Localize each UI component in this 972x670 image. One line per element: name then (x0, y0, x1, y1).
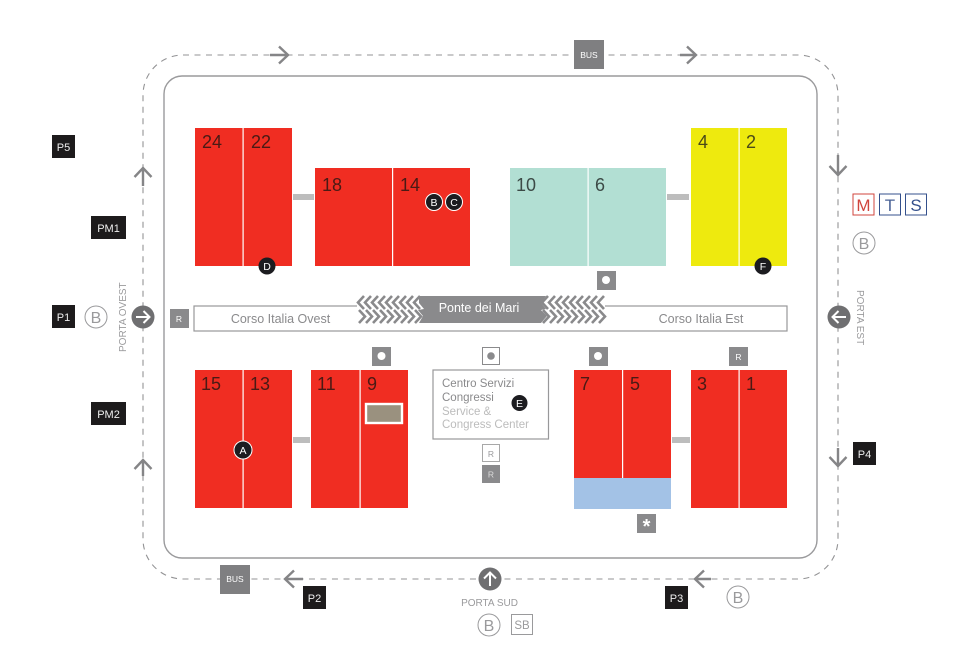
parking PM1 (91, 216, 126, 239)
hall block 11-9: 11 (317, 374, 336, 394)
marker A: A (239, 445, 247, 457)
hall block 3-1: 3 (697, 374, 707, 394)
outlined dot square congress (482, 348, 500, 364)
marker D: D (263, 261, 271, 273)
hall block 18-14 (315, 168, 470, 266)
hall block 15-13: 13 (250, 374, 270, 394)
road arrows (134, 46, 846, 588)
BUS stop bottom (220, 565, 250, 594)
label: porta est: PORTA EST (854, 290, 865, 345)
hall block 7-5 (574, 370, 671, 509)
metro M: M (856, 196, 871, 215)
dot square hall 9 (372, 347, 391, 366)
hall block 4-2: 2 (746, 132, 756, 152)
SB square (512, 614, 532, 634)
hall block 11-9 (311, 370, 408, 508)
hall block 11-9: 9 (367, 374, 377, 394)
gate arrow south (478, 568, 502, 590)
outer dashed road (143, 55, 838, 579)
bus circle B west (85, 306, 107, 328)
parking P2: P2 (308, 593, 321, 605)
congress center box: Congressi (442, 392, 494, 404)
outlined R square: R (488, 449, 494, 459)
gate arrow west (132, 306, 154, 328)
parking P3 (665, 586, 688, 609)
R square hall 3-1 (729, 347, 748, 366)
label: Corso Italia Est: Corso Italia Est (659, 312, 744, 326)
bridge label: Ponte dei Mari (439, 301, 519, 315)
hall block 15-13: 15 (201, 374, 221, 394)
parking PM2: PM2 (97, 409, 120, 421)
marker C (446, 194, 462, 210)
hall connectors (293, 194, 690, 443)
hall block 24-22: 24 (202, 132, 222, 152)
hall block 10-6: 6 (595, 175, 605, 195)
dot square hall 7 (589, 347, 608, 366)
R square west (170, 309, 189, 328)
bus circle B east (853, 232, 875, 254)
R square hall 3-1: R (735, 352, 742, 362)
label: porta sud: PORTA SUD (461, 598, 518, 609)
parking PM1: PM1 (97, 223, 120, 235)
BUS stop bottom: BUS (226, 574, 244, 584)
filled R square: R (488, 470, 494, 480)
bus circle B south: B (484, 618, 494, 635)
bus circle B west: B (91, 310, 101, 327)
hall block 10-6: 10 (516, 175, 536, 195)
parking PM2 (91, 402, 126, 425)
hall block 7-5: 5 (630, 374, 640, 394)
congress center box: Service & (442, 406, 492, 418)
bus circle B south-east (727, 586, 749, 608)
BUS stop top: BUS (580, 50, 598, 60)
hall block 18-14: 14 (400, 175, 420, 195)
marker E (512, 395, 528, 411)
bus circle B south (478, 614, 500, 636)
label: porta ovest: PORTA OVEST (118, 282, 129, 352)
congress center box: Centro Servizi (442, 378, 514, 390)
R square west: R (176, 314, 182, 324)
parking P5: P5 (57, 142, 70, 154)
hall block 10-6 (510, 168, 666, 266)
hall block 15-13 (195, 370, 292, 508)
congress center box: E (516, 398, 523, 410)
tram T: T (885, 196, 895, 215)
marker C: C (450, 197, 458, 209)
outlined R square (482, 444, 500, 462)
asterisk square: * (643, 516, 651, 538)
dot square hall 6 (597, 271, 616, 290)
label: Corso Italia Ovest: Corso Italia Ovest (231, 312, 331, 326)
suburban S: S (910, 196, 922, 215)
parking P1 (52, 305, 75, 328)
marker F: F (760, 261, 766, 273)
corso italia road (194, 306, 787, 331)
marker B (426, 194, 442, 210)
right chevrons (542, 296, 605, 323)
congress center box: Congress Center (442, 419, 529, 431)
ponte dei mari bridge (357, 296, 605, 324)
BUS stop top (574, 40, 604, 69)
hall block 3-1 (691, 370, 787, 508)
hall block 7-5: 7 (580, 374, 590, 394)
parking P4: P4 (858, 449, 871, 461)
hall block 18-14: 18 (322, 175, 342, 195)
parking P4 (853, 442, 876, 465)
hall block 24-22: 22 (251, 132, 271, 152)
bus circle B south-east: B (733, 590, 743, 607)
suburban S (906, 194, 926, 215)
marker A (234, 441, 252, 459)
tram T (880, 194, 900, 215)
left chevrons (358, 296, 421, 323)
hall block 3-1: 1 (746, 374, 756, 394)
asterisk square (637, 514, 656, 538)
hall block 4-2 (691, 128, 787, 266)
parking P1: P1 (57, 312, 70, 324)
gate arrow east (828, 306, 850, 328)
bus circle B east: B (859, 236, 869, 253)
marker B: B (430, 197, 438, 209)
hall block 4-2: 4 (698, 132, 708, 152)
parking P2 (303, 586, 326, 609)
marker F (754, 258, 772, 274)
parking P5 (52, 135, 75, 158)
metro M (853, 194, 874, 215)
SB square: SB (514, 620, 530, 632)
inner fairground boundary (164, 76, 817, 558)
filled R square (482, 465, 500, 483)
parking P3: P3 (670, 593, 683, 605)
hall block 24-22 (195, 128, 292, 266)
marker D (258, 258, 276, 274)
inner room in hall 9 (366, 404, 402, 423)
congress center box (433, 370, 548, 439)
